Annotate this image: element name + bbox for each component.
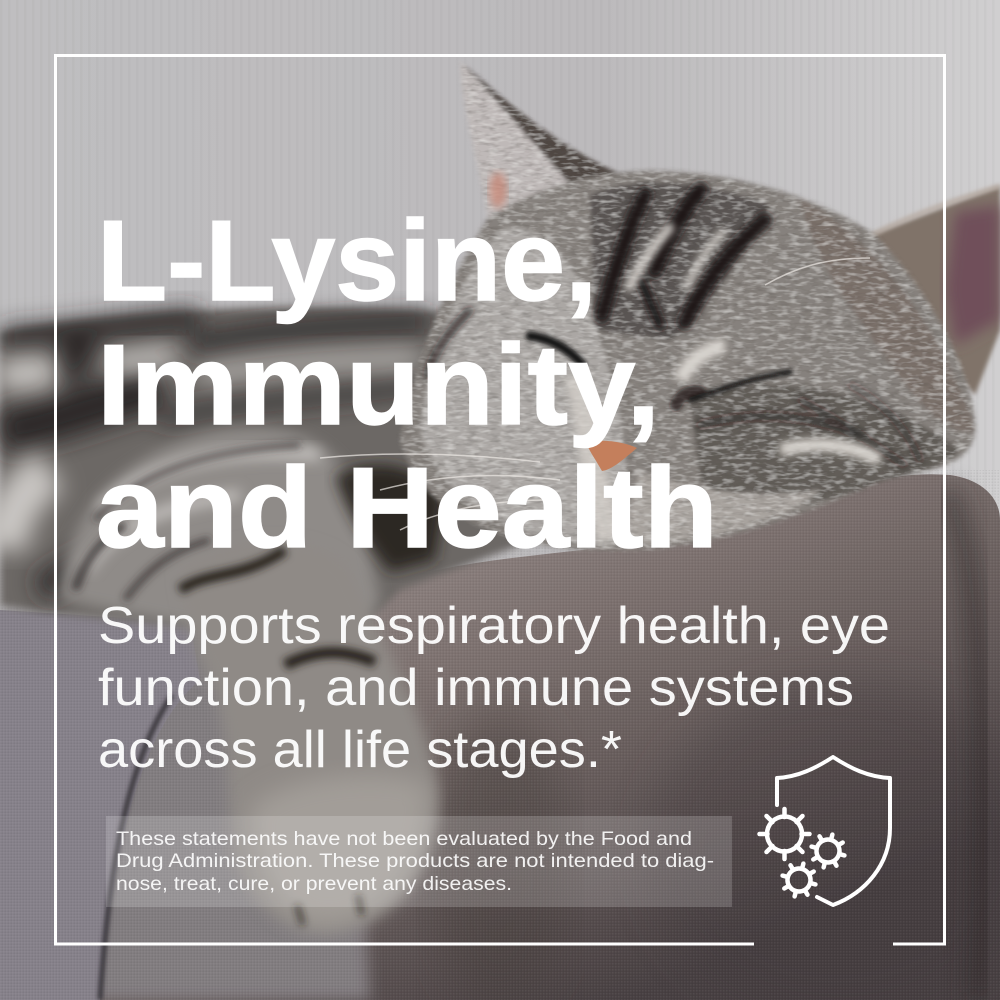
- subtitle: function, and immune systems: [98, 659, 854, 717]
- sofa seam: [100, 695, 172, 1000]
- cat body: [0, 307, 560, 640]
- nose: [586, 441, 637, 471]
- icon: small gear: [778, 859, 820, 901]
- disclaimer box: These statements have not been evaluated by the Food and: [116, 828, 692, 850]
- icon: shield outline: [777, 757, 890, 905]
- eyes: [530, 336, 790, 405]
- whiskers: [320, 258, 870, 530]
- title: [96, 198, 718, 572]
- left ear: [460, 62, 622, 240]
- subtitle: across all life stages.*: [98, 721, 622, 779]
- furry flank around shoulder: [60, 428, 380, 640]
- wall: [0, 0, 1000, 700]
- title: Immunity,: [97, 322, 660, 449]
- dark gap between leg and head: [335, 465, 445, 572]
- title: L-Lysine,: [97, 198, 597, 325]
- subtitle: [98, 597, 890, 779]
- light left face: [420, 228, 626, 545]
- head shape: [400, 171, 975, 550]
- right side of head: [800, 200, 975, 431]
- outer white frame with gap at bottom right: [56, 56, 944, 944]
- cat head: [320, 62, 1000, 550]
- disclaimer box: Drug Administration. These products are not intended to diag-: [116, 850, 714, 872]
- title: and Health: [96, 445, 718, 572]
- right ear: [868, 186, 1000, 395]
- furred head and left ear: [400, 62, 975, 550]
- disclaimer box: [106, 816, 732, 907]
- subtitle: Supports respiratory health, eye: [98, 597, 890, 655]
- disclaimer box: nose, treat, cure, or prevent any diseases.: [116, 873, 512, 895]
- forehead stripes: [428, 190, 920, 465]
- muzzle: [620, 470, 820, 545]
- ear pink: [489, 172, 507, 208]
- icon: shield with gears: [760, 757, 890, 905]
- dark forehead patch: [590, 183, 770, 340]
- icon: large gear: [760, 809, 810, 859]
- icon: medium gear: [807, 830, 849, 872]
- darker cheek: [690, 384, 960, 504]
- cat foreleg and paw: [180, 542, 438, 932]
- light facial fur: [575, 225, 880, 540]
- sofa: [0, 470, 1000, 1000]
- blurred body stripes: [0, 318, 430, 590]
